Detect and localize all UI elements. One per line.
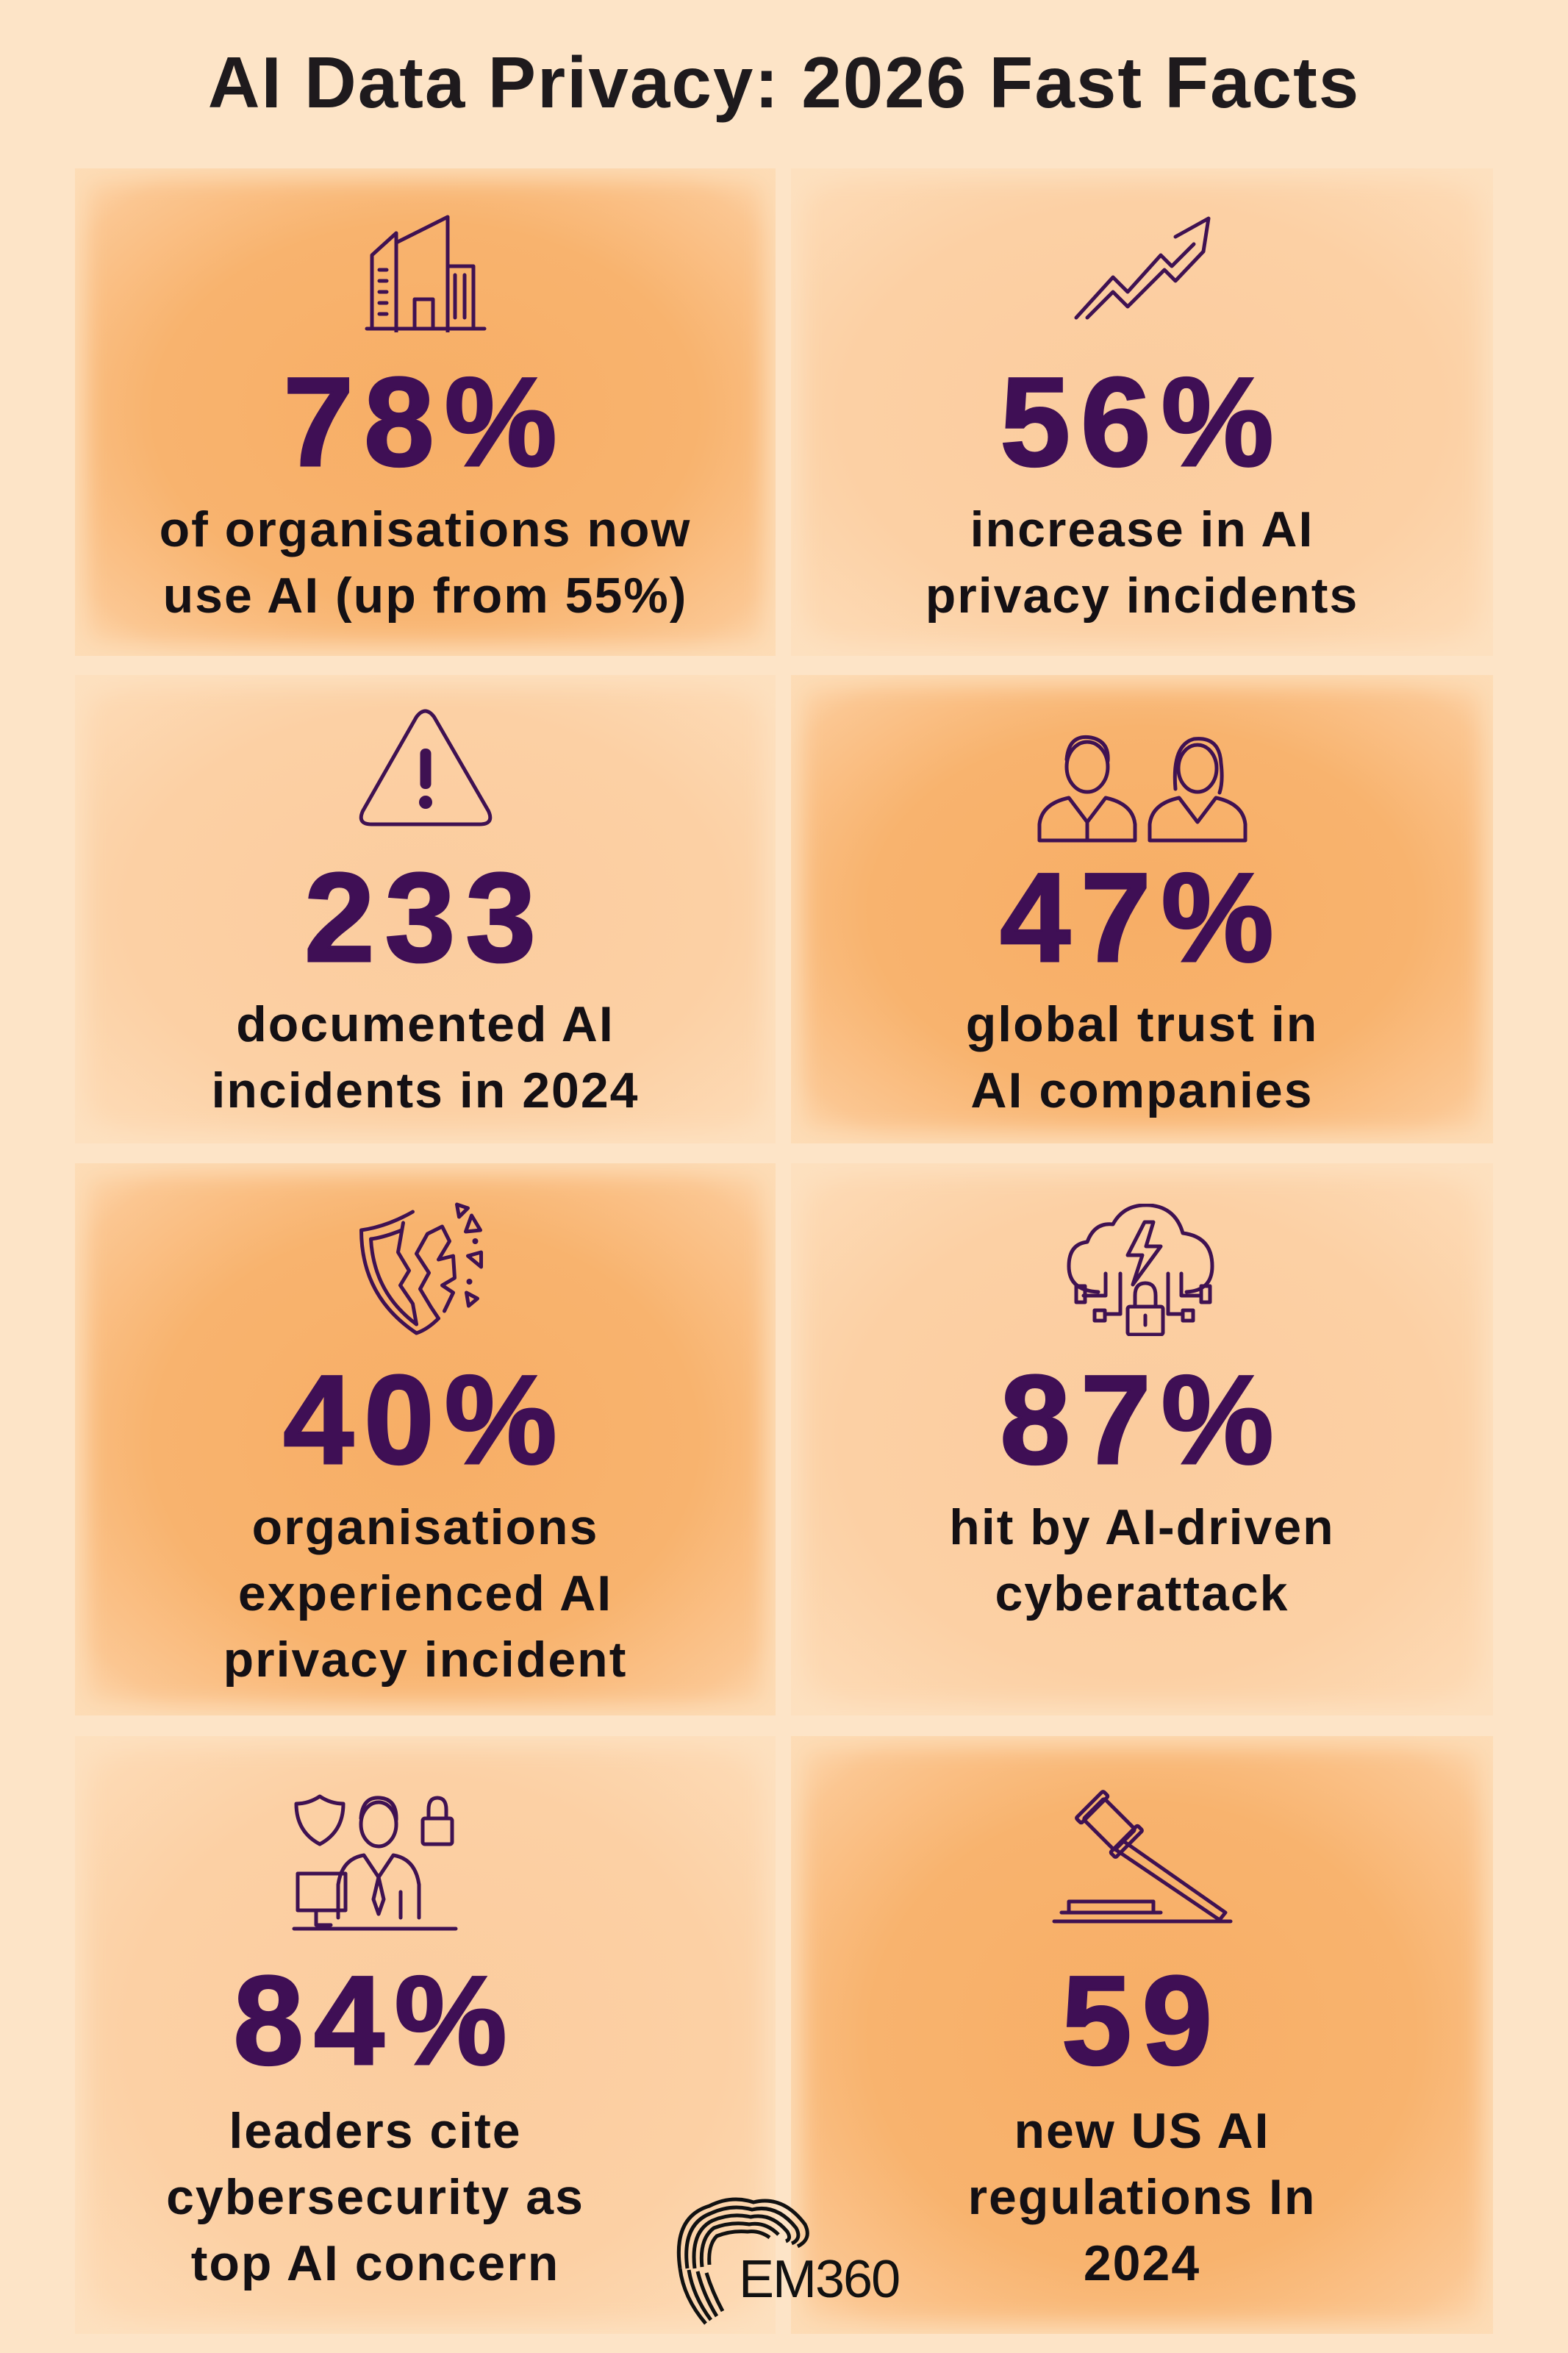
number: 84%	[233, 1950, 518, 2091]
text: AI companies	[970, 1063, 1314, 1118]
text: top AI concern	[191, 2235, 559, 2291]
text	[166, 2103, 584, 2291]
text: documented AI	[236, 996, 615, 1052]
text: incidents in 2024	[212, 1063, 639, 1118]
number: 78%	[283, 351, 568, 493]
text: new US AI	[1014, 2103, 1270, 2159]
logo: EM360: EM360	[739, 2250, 899, 2309]
text	[223, 1499, 627, 1688]
panel: 87% cyberattack	[791, 1163, 1493, 1715]
number: 40%	[283, 1349, 568, 1490]
text: use AI (up from 55%)	[163, 568, 687, 624]
text	[949, 1499, 1335, 1621]
text: experienced AI	[238, 1565, 612, 1621]
text: cyberattack	[995, 1565, 1289, 1621]
icon: leader with shield and lock	[293, 1794, 457, 1931]
panel: 84% leaders cite cybersecurity	[75, 1736, 776, 2334]
text	[212, 996, 639, 1118]
panel: 47% trust	[791, 675, 1493, 1143]
text: cybersecurity as	[166, 2169, 584, 2225]
panel: 233 incidents	[75, 675, 776, 1143]
text: organisations	[252, 1499, 598, 1555]
text	[968, 2103, 1316, 2291]
text	[926, 501, 1358, 624]
logo: EM360	[676, 2197, 899, 2325]
text: privacy incidents	[926, 568, 1358, 624]
text: increase in AI	[970, 501, 1314, 557]
text: privacy incident	[223, 1632, 627, 1688]
number: 233	[304, 847, 546, 988]
text: hit by AI-driven	[949, 1499, 1335, 1555]
number: 47%	[1000, 847, 1284, 988]
icon: broken shield	[359, 1203, 483, 1335]
title: AI Data Privacy: 2026 Fast Facts	[208, 42, 1360, 123]
icon: warning triangle	[359, 709, 493, 826]
icon: cloud with lock	[1067, 1204, 1214, 1336]
panel: 78% organisations use AI	[75, 168, 776, 656]
panel: 40% experienced incident	[75, 1163, 776, 1715]
text: of organisations now	[160, 501, 691, 557]
panel: 56% increase	[791, 168, 1493, 656]
icon: gavel	[1053, 1790, 1232, 1924]
text	[160, 501, 691, 624]
icon: people	[1038, 735, 1247, 843]
icon: trend arrow	[1075, 216, 1210, 319]
panel: 59 regulations	[791, 1736, 1493, 2334]
text: regulations In	[968, 2169, 1316, 2225]
number: 87%	[1000, 1349, 1284, 1490]
number: 56%	[1000, 351, 1284, 493]
number: 59	[1062, 1950, 1222, 2091]
icon: buildings	[365, 215, 487, 332]
text: leaders cite	[229, 2103, 522, 2159]
text	[966, 996, 1318, 1118]
text: 2024	[1084, 2235, 1200, 2291]
text: global trust in	[966, 996, 1318, 1052]
